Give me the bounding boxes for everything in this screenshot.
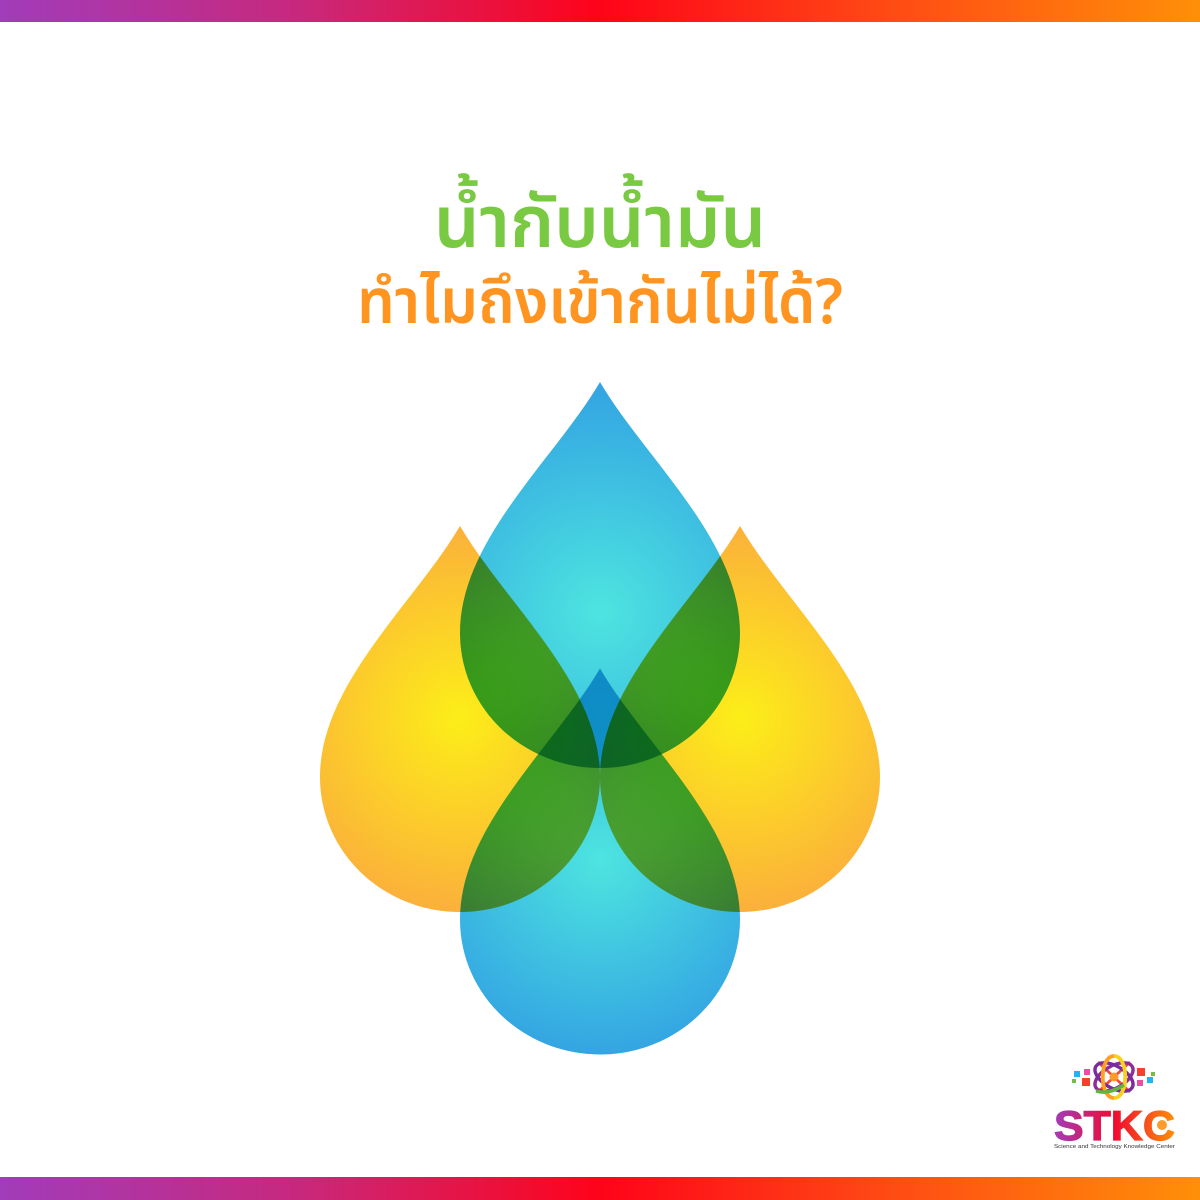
drop: oil right <box>600 526 880 912</box>
drop: water top <box>460 382 740 768</box>
overlap shading right <box>620 556 740 760</box>
title line 2: why don't they mix: ทำไมถึงเข้ากันไม่ได้? <box>357 257 843 351</box>
drop: oil left <box>320 526 600 912</box>
STKC logo <box>1054 1056 1175 1150</box>
bottom gradient bar <box>0 1177 1200 1200</box>
logo dot <box>1157 1120 1167 1130</box>
drop: water bottom <box>460 668 740 1054</box>
top gradient bar <box>0 0 1200 22</box>
logo tagline: Science and Technology Knowledge Center <box>1054 1144 1175 1150</box>
overlap shading left <box>460 556 580 754</box>
title line 1: water and oil: น้ำกับน้ำมัน <box>434 172 766 280</box>
icon: atom <box>1072 1056 1155 1098</box>
logo wordmark: STKC <box>1054 1102 1175 1149</box>
title <box>357 172 843 351</box>
overlapping drops illustration <box>320 382 880 1054</box>
